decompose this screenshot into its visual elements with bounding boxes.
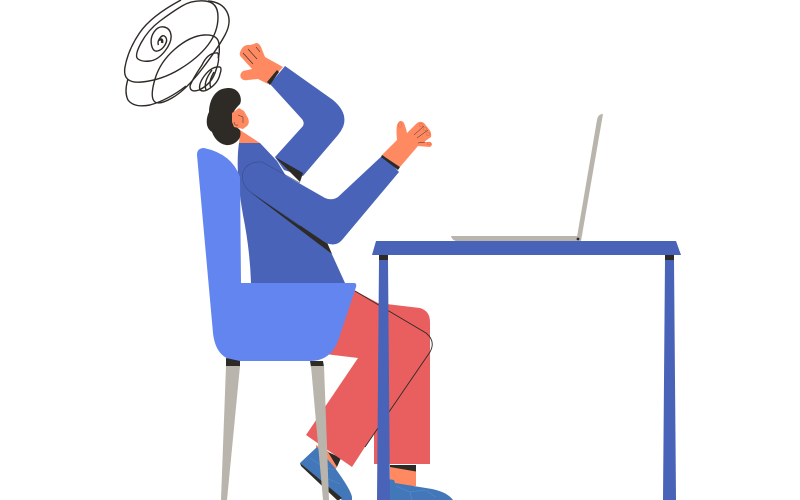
jacket torso <box>238 143 345 283</box>
dark shirt shadows <box>250 157 332 254</box>
trousers <box>306 288 432 467</box>
icon: raised right hand <box>381 121 432 170</box>
head: hair <box>207 88 241 145</box>
desk <box>372 241 681 500</box>
near arm sleeve <box>242 155 399 244</box>
icon: laptop <box>451 114 603 241</box>
shoe: back foot <box>388 465 453 500</box>
shoe: front foot <box>300 445 352 500</box>
chair legs <box>221 358 329 500</box>
neck <box>239 130 260 144</box>
chair back and seat <box>197 148 356 361</box>
icon: raised left hand <box>240 43 283 85</box>
scribble above head <box>125 0 229 106</box>
head: face <box>232 108 249 129</box>
far arm sleeve <box>270 66 344 176</box>
